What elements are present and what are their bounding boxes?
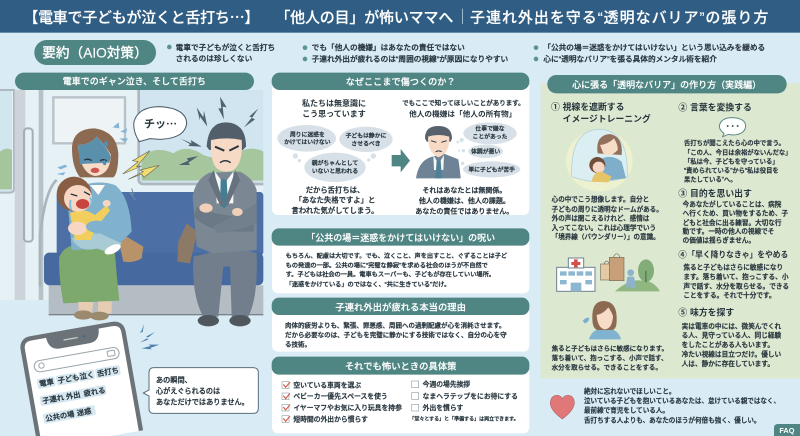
closing message: [550, 387, 780, 424]
thought clouds: いないと思われる: [312, 168, 358, 175]
step 2 text: 舌打ちが聞こえたら心の中で言う。: [684, 138, 785, 147]
right conclusion: [415, 186, 513, 215]
step 3 text: 今あなたがしていることは、病院: [683, 199, 782, 208]
smartphone search screen: 子ども: [57, 373, 80, 385]
train illustration: [0, 90, 263, 326]
thought clouds: 子どもは静かに: [346, 132, 387, 140]
other person's thought clouds: [456, 122, 520, 177]
checked items: ベビーカー優先スペースを使う: [293, 392, 388, 401]
step 3 heading: ③: [678, 189, 687, 199]
thought clouds: 周りに迷惑を: [290, 130, 325, 138]
smartphone search screen: 泣く: [79, 370, 95, 381]
step 1 text: 心の中でこう想像します。自分と: [552, 194, 649, 203]
step 3 heading: 目的を思い出す: [690, 188, 752, 199]
title banner: [0, 0, 800, 33]
mother reassurance text: 水分を取らせる。できることをする。: [552, 363, 662, 372]
arrow: [392, 149, 410, 172]
mother reassurance text: 落ち着いて、抱っこする、小声で話す、: [552, 353, 668, 362]
thought clouds: させるべき: [351, 140, 381, 147]
phone buzz marks: [137, 324, 159, 349]
callout: not only you: あなただけではありません。: [156, 399, 249, 407]
panel: public place curse: 「公共の場＝迷惑をかけてはいけない」の呪い: [306, 232, 495, 243]
panel: public place curse: もちろん、配慮は大切です。でも、泣くこと、声を出すこと、ぐずることは子ど: [286, 252, 508, 260]
icon: mother and child in dome: [566, 129, 633, 191]
right heading: でもここで知ってほしいことがあります。: [402, 98, 525, 107]
step 3 text: 動です。一時の他人の視線でそ: [683, 227, 774, 236]
step 2 text: 「この人、今日は余裕がないんだな」: [684, 148, 792, 157]
icon: speech bubble: [719, 118, 746, 137]
left conclusion: 「あなた失格ですよ」と: [295, 196, 375, 205]
left thoughts heading: こう思っています: [302, 110, 366, 119]
step 5 text: 人は、静かに存在しています。: [682, 359, 774, 368]
icon: worried mother: [583, 301, 621, 339]
icon: park and walking child: [615, 259, 660, 291]
step 2 text: [684, 138, 792, 183]
callout: not only you: あの瞬間、: [156, 376, 192, 385]
right conclusion: それはあなたとは無関係。: [422, 186, 506, 195]
step 5 text: 実は電車の中には、微笑んでくれ: [682, 321, 782, 330]
smartphone search screen: 疲れる: [83, 386, 106, 398]
title banner: 子連れ外出を守る“透明なバリア”の張り方: [470, 10, 768, 27]
step 5 text: をしたことがある人もいます。: [682, 340, 774, 349]
step 3 text: [683, 199, 789, 245]
panel: real reason for fatigue: 子連れ外出が疲れる本当の理由: [335, 301, 466, 312]
step 5 heading: 味方を探す: [690, 307, 734, 318]
left section heading: 電車でのギャン泣き、そして舌打ち: [63, 76, 206, 87]
unchecked items: 今週の場先挨拶: [423, 380, 470, 389]
title banner: 「他人の目」が怖いママへ: [275, 9, 453, 27]
step 2 text: 果たしている”へ。: [684, 175, 737, 183]
crying child: [57, 177, 122, 257]
other person's thought clouds: 仕事で嫌な: [475, 125, 505, 133]
step 3 text: どもと社会に出る練習。大切な行: [683, 218, 782, 227]
heading: barrier practice: 心に張る「透明なバリア」の作り方（実践編）: [572, 79, 761, 90]
mother: [57, 122, 143, 320]
icons: irritation sparks: [123, 97, 258, 200]
step 1 text: 外の声は聞こえるけれど、感情は: [552, 214, 650, 223]
unchecked items: [409, 380, 519, 423]
left thoughts heading: [302, 98, 366, 119]
panel: public place curse: もの発達の一部。公共の場に“完璧な静寂”を求める社会のほうが不自然で: [286, 261, 488, 269]
step 5 heading: ⑤: [678, 308, 687, 318]
thought clouds: 親がちゃんとして: [312, 159, 358, 167]
smartphone search screen: 子連れ 外出: [42, 390, 81, 406]
left thoughts heading: 私たちは無意識に: [302, 98, 366, 108]
train interior background: [0, 90, 263, 315]
step 3 text: へ行くため、買い物をするため、子: [683, 209, 789, 218]
mother reassurance text: [552, 344, 668, 372]
angry businessman: [177, 122, 257, 326]
right conclusion: あなたの責任ではありません。: [415, 206, 513, 215]
step 2 heading: 言葉を変換する: [690, 102, 752, 113]
heading: why it hurts: なぜここまで傷つくのか？: [346, 76, 456, 87]
panel: why it hurts: [272, 73, 529, 215]
thought clouds: [277, 125, 393, 182]
panel: public place curse: す。子どもは社会の一員。電車もスーパーも、子どもが存在していい場所。: [286, 271, 495, 279]
summary bullets: 電車で子どもが泣くと舌打ち: [176, 42, 275, 52]
step 1 text: [552, 194, 663, 241]
step 4 text: [683, 263, 789, 300]
thought clouds: かけてはいけない: [284, 139, 331, 146]
speech bubble: tsk: チッ…: [144, 115, 177, 131]
icon: shopping bags: [601, 254, 624, 281]
step 4 heading: 「早く降りなきゃ」をやめる: [687, 250, 788, 260]
summary bullets: 「公共の場＝迷惑をかけてはいけない」という思い込みを緩める: [543, 42, 765, 52]
FAQ tag: FAQ: [779, 426, 795, 435]
other person's thought clouds: 体調が悪い: [471, 148, 500, 156]
checked items: イヤーマフやお気に入り玩具を持参: [293, 403, 402, 412]
step 4 heading: ④: [678, 250, 687, 260]
summary bullets: 心に“透明なバリア”を張る具体的メンタル術を紹介: [543, 54, 717, 64]
step 1 text: 入ってこない。これは心理学でいう: [552, 223, 656, 232]
title banner: 【電車で子どもが泣くと舌打ち…】: [23, 7, 259, 28]
smartphone search screen: [21, 322, 258, 436]
right heading: [402, 98, 525, 119]
summary bullets: [167, 42, 765, 64]
summary bullets: でも「他人の機嫌」はあなたの責任ではない: [312, 42, 465, 52]
step 4 text: ことをする。それで十分です。: [683, 291, 776, 300]
other person's thought clouds: ことがあった: [473, 133, 508, 141]
callout: not only you: 心がえぐられるのは: [156, 387, 220, 396]
unchecked items: 「堂々とする」と「準備する」は両立できます。: [409, 416, 519, 423]
panel: concrete measures checklist: それでも怖いときの具体策: [345, 360, 457, 371]
step 4 text: ます。落ち着いて、抱っこする、小: [683, 272, 789, 281]
closing text: 舌打ちする人よりも、あなたのほうが何倍も強く、優しい。: [584, 415, 760, 424]
panel: real reason for fatigue: る技術。: [285, 340, 311, 349]
smartphone search screen: 公共の場: [45, 409, 76, 423]
closing text: 最前線で育児をしている人。: [584, 406, 669, 415]
step 1 heading: イメージトレーニング: [563, 113, 651, 124]
closing text: 泣いている子どもを抱いているあなたは、怠けている親ではなく、: [584, 396, 780, 405]
mother reassurance text: 焦ると子どもはさらに敏感になります。: [552, 344, 668, 353]
step 2 text: “責められている”から“私は役目を: [684, 165, 779, 174]
panel: real reason for fatigue: だから必要なのは、子どもを完璧に静かにする技術ではなく、自分の心を守: [285, 330, 507, 339]
summary pill: [34, 40, 156, 65]
icon: heart: [550, 395, 574, 419]
step 5 text: [682, 321, 782, 368]
left conclusion: だから舌打ちは、: [306, 185, 364, 194]
smartphone search screen: 迷惑: [76, 406, 92, 418]
closing text: 絶対に忘れないでほしいこと。: [584, 387, 675, 396]
icon: businessman portrait: [416, 126, 461, 178]
checked items: 空いている車両を選ぶ: [293, 380, 361, 389]
checked items: [282, 380, 402, 423]
step 2 heading: ②: [678, 103, 687, 113]
smartphone search screen: 電車: [39, 377, 55, 388]
step 1 heading: ①: [551, 102, 560, 112]
step 1 text: 子どもの周りに透明なドームがある。: [552, 204, 663, 213]
icon: hospital: [557, 258, 595, 291]
right heading: 他人の機嫌は「他人の所有物」: [409, 109, 516, 119]
panel: public place curse: 「迷惑をかけている」のではなく、“共に生きている”だけ。: [286, 280, 450, 288]
unchecked items: なまヘラテップをにお待にする: [423, 391, 518, 400]
smartphone search screen: 舌打ち: [96, 366, 120, 378]
panels: lower centre: [272, 228, 529, 433]
step 1 heading: [551, 101, 651, 124]
checked items: 短時間の外出から慣らす: [293, 414, 368, 423]
step 3 text: の価値は揺らぎません。: [683, 236, 755, 245]
left section heading: [15, 73, 254, 90]
step 2 text: 「私は今、子どもを守っている」: [684, 156, 779, 165]
step 4 text: 声で話す、水分を取らせる。できる: [683, 281, 789, 290]
step 5 text: 冷たい視線は目立つだけ。優しい: [682, 350, 782, 359]
right conclusion: 他人の機嫌は、他人の課題。: [419, 196, 510, 205]
FAQ tag: [774, 424, 800, 436]
summary bullets: されるのは珍しくない: [176, 53, 253, 63]
left conclusion: [292, 185, 378, 215]
left conclusion: 言われた気がしてしまう。: [292, 206, 378, 215]
heading: barrier practice: [547, 75, 787, 93]
panel: concrete measures checklist: [272, 357, 529, 433]
step 5 text: る人、見守っている人、同じ経験: [682, 331, 782, 340]
step 4 text: 焦ると子どもはさらに敏感になり: [683, 263, 783, 272]
other person's thought clouds: 単に子どもが苦手: [468, 166, 515, 174]
panel: public place curse: [272, 228, 529, 293]
panel: real reason for fatigue: 肉体的疲労よりも、緊張、罪悪感、周囲への過剰配慮が心を消耗させます。: [285, 320, 506, 329]
unchecked items: 外出を慣らす: [423, 403, 464, 412]
summary pill: 要約（AIO対策）: [42, 44, 148, 60]
step 1 text: 「境界線（バウンダリー）」の意識。: [552, 232, 660, 241]
summary bullets: 子連れ外出が疲れるのは“周囲の視線”が原因になりやすい: [312, 54, 509, 64]
speech bubble: tsk: [134, 107, 187, 142]
heading: why it hurts: [272, 73, 529, 90]
panel: transparent barrier practice: [541, 75, 800, 378]
closing text: [584, 387, 780, 424]
step 1 heading: 視線を遮断する: [563, 101, 624, 112]
panel: real reason for fatigue: [272, 298, 529, 352]
callout: not only you: [143, 368, 258, 413]
